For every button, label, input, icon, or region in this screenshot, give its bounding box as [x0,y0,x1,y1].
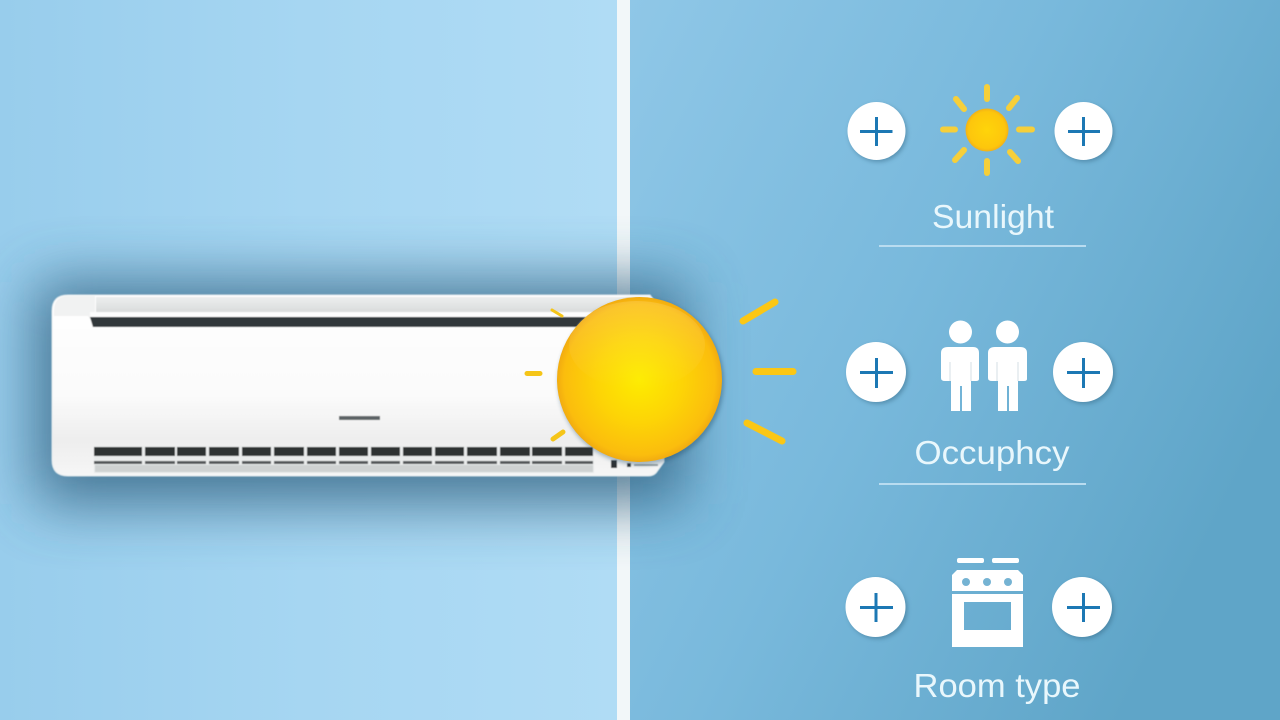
sun rays on the right [743,302,793,441]
plus button right [1054,102,1114,162]
plus button left [848,102,907,162]
label: Sunlight: Sunlight [932,198,1054,235]
icon: stove [952,558,1023,647]
top air slot [90,317,600,327]
plus button right [1053,342,1115,404]
air conditioner shadow [35,282,685,504]
plus button right [1052,577,1114,639]
left end cap shading [54,296,95,326]
sun disc shadow [558,299,724,465]
icon: sun [943,87,1032,173]
label: Room type: Room type [914,667,1080,704]
bottom vent [94,446,594,473]
row: sunlight [848,87,1114,247]
indicator marks [611,460,658,468]
icon: two people [941,320,1027,411]
air conditioner unit [52,295,664,476]
right wall background [630,0,1280,720]
brand label [339,416,380,420]
plus button left [846,577,908,639]
white divider line [617,0,630,720]
left wall background [0,0,617,720]
large sun [527,297,793,465]
sun rays on the left [527,310,563,439]
top panel [96,297,640,312]
row: occupancy [846,320,1115,485]
unit body [52,295,664,476]
plus button left [846,342,908,404]
row: room type [846,558,1114,704]
sun disc [557,297,722,462]
label: Occuphcy: Occuphcy [914,434,1070,471]
